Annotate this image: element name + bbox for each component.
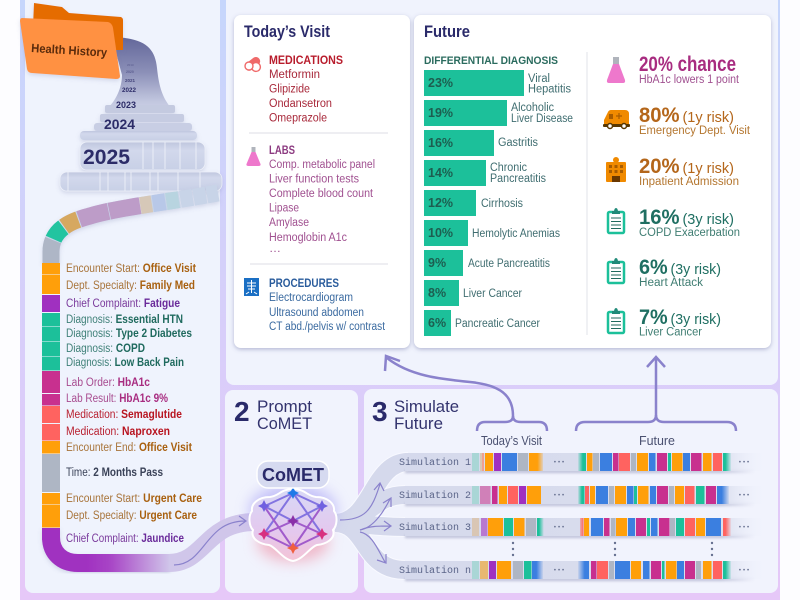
- labs list: Liver function tests: [269, 174, 359, 186]
- icon: clipboard liver cancer: [608, 308, 624, 333]
- medications list: [269, 55, 343, 124]
- differential diagnosis bar chart: Gastritis: [498, 137, 538, 149]
- procedures list: Ultrasound abdomen: [269, 307, 364, 319]
- event labels: Time: 2 Months Pass: [66, 467, 163, 479]
- arrow: today's visit bracket to card: [385, 356, 547, 431]
- simulation row n: •••: [739, 568, 751, 574]
- labs list: LABS: [269, 145, 295, 157]
- year labels: 2022: [122, 88, 137, 94]
- procedures list: Electrocardiogram: [269, 292, 353, 304]
- differential diagnosis bar chart: 16%: [428, 136, 453, 150]
- simulation row 3: [399, 518, 765, 538]
- procedures list: PROCEDURES: [269, 278, 339, 290]
- stat: liver cancer: 7%(3y risk): [639, 306, 721, 329]
- icon: ambulance: [603, 110, 630, 128]
- icon: health history folder: Health History: [31, 41, 108, 60]
- event labels: Medication: Semaglutide: [66, 409, 182, 421]
- year labels: 2020: [126, 70, 134, 74]
- card: future: [414, 15, 771, 348]
- labs list: Comp. metabolic panel: [269, 159, 375, 171]
- cloud blob: [249, 489, 337, 561]
- icon: clipboard heart attack: [608, 258, 624, 283]
- heading: step 3: [372, 396, 459, 433]
- ribbon timeline segments: [51, 193, 218, 263]
- differential diagnosis bar chart: Cirrhosis: [481, 198, 523, 210]
- simulation row 2: •••: [739, 493, 751, 499]
- simulation row 2: •••: [554, 493, 566, 499]
- ribbon column from folder: [108, 37, 171, 108]
- icon: health history folder: [20, 3, 123, 79]
- labs list: [269, 145, 375, 255]
- heading: future: Future: [424, 23, 470, 41]
- strip colour blocks: [42, 263, 60, 540]
- event labels: Dept. Specialty: Family Med: [66, 280, 195, 292]
- vertical ellipsis dots: [512, 542, 713, 556]
- simulation row 1: •••: [739, 460, 751, 466]
- simulation row 3: •••: [554, 525, 566, 531]
- stat: COPD: [639, 206, 740, 239]
- ribbon layers: [60, 105, 222, 191]
- event labels: Chief Complaint: Jaundice: [66, 533, 184, 545]
- year labels: 2025: [83, 146, 130, 169]
- stat: COPD: 16%(3y risk): [639, 206, 734, 229]
- stat: HbA1c chance: [639, 53, 740, 86]
- heading: step 2: [234, 396, 312, 433]
- differential diagnosis bar chart: Liver Cancer: [463, 288, 522, 300]
- simulation row n: [399, 561, 765, 581]
- differential diagnosis bar chart: Acute Pancreatitis: [468, 258, 550, 270]
- curved end of strip: [51, 528, 170, 563]
- differential diagnosis bar chart: DIFFERENTIAL DIAGNOSIS: [424, 55, 558, 67]
- simulation row 2: [399, 486, 765, 506]
- stat: inpatient admission: [639, 155, 739, 188]
- stat: heart attack: [639, 256, 721, 289]
- differential diagnosis bar chart: 6%: [428, 316, 446, 330]
- network nodes: [258, 487, 328, 554]
- differential diagnosis bar chart: 8%: [428, 286, 446, 300]
- ribbon into CoMET: [169, 516, 255, 565]
- event labels: Diagnosis: Type 2 Diabetes: [66, 328, 192, 340]
- event labels: Diagnosis: Essential HTN: [66, 314, 183, 326]
- simulation row 1: •••: [554, 460, 566, 466]
- heading: step 3: 3: [372, 396, 388, 427]
- stat: emergency visit: [639, 104, 751, 137]
- heading: step 3: Future: [394, 414, 443, 433]
- heading: step 2: Prompt: [257, 397, 312, 416]
- panel: health history: [25, 0, 220, 593]
- differential diagnosis bar chart: Pancreatic Cancer: [455, 318, 540, 330]
- medications list: Omeprazole: [269, 112, 327, 124]
- event labels: Lab Order: HbA1c: [66, 377, 151, 389]
- differential diagnosis bar chart: 23%: [428, 76, 453, 90]
- CoMET label: CoMET: [262, 465, 324, 485]
- stat: liver cancer: Liver Cancer: [639, 326, 702, 338]
- panel: prompt CoMET: [225, 390, 358, 593]
- event labels: Chief Complaint: Fatigue: [66, 298, 180, 310]
- event labels: Dept. Specialty: Urgent Care: [66, 510, 197, 522]
- year labels: 2023: [116, 100, 136, 110]
- panel: simulate future: [364, 389, 778, 593]
- simulation row 3: Simulation 3: [399, 522, 471, 534]
- simulation row 3: •••: [739, 525, 751, 531]
- icon: hospital: [606, 157, 626, 182]
- card: today's visit: [234, 15, 410, 348]
- event labels: Diagnosis: COPD: [66, 343, 145, 355]
- stat: inpatient admission: 20%(1y risk): [639, 155, 734, 178]
- labs list: …: [269, 243, 281, 255]
- stat: HbA1c chance: 20% chance: [639, 53, 736, 76]
- medications list: MEDICATIONS: [269, 55, 343, 67]
- differential diagnosis bar chart: 10%: [428, 226, 453, 240]
- stat: HbA1c chance: HbA1c lowers 1 point: [639, 74, 740, 86]
- panel: results: [226, 0, 778, 385]
- medications list: Metformin: [269, 69, 320, 81]
- year labels: 2021: [125, 78, 136, 83]
- medications list: Ondansetron: [269, 98, 332, 110]
- differential diagnosis bar chart: [424, 55, 573, 336]
- medications list: Glipizide: [269, 84, 310, 96]
- event labels: Medication: Naproxen: [66, 426, 170, 438]
- differential diagnosis bar chart: Alcoholic: [511, 102, 554, 114]
- event labels: [66, 263, 202, 545]
- stat: emergency visit: 80%(1y risk): [639, 104, 734, 127]
- heading: today's visit: Today’s Visit: [244, 23, 330, 41]
- event strip: [42, 263, 202, 563]
- differential diagnosis bar chart: 14%: [428, 166, 453, 180]
- icon: x-ray: [244, 278, 259, 296]
- simulation row n: Simulation n: [399, 565, 471, 577]
- stat: emergency visit: Emergency Dept. Visit: [639, 125, 751, 137]
- differential diagnosis bar chart: Pancreatitis: [490, 173, 546, 185]
- differential diagnosis bar chart: Hepatitis: [528, 84, 571, 96]
- icon: large flask: [607, 57, 625, 83]
- event labels: Encounter Start: Office Visit: [66, 263, 196, 275]
- simulation row 1: [399, 453, 765, 473]
- differential diagnosis bar chart: Hemolytic Anemias: [472, 228, 560, 240]
- differential diagnosis bar chart: 9%: [428, 256, 446, 270]
- arrow: future bracket to card: [576, 357, 736, 431]
- glow: [249, 484, 337, 562]
- simulation row n: •••: [554, 568, 566, 574]
- year labels: [83, 63, 137, 169]
- year labels: 2024: [104, 116, 135, 132]
- stat: COPD: COPD Exacerbation: [639, 227, 740, 239]
- procedures list: [269, 278, 386, 333]
- stat: liver cancer: [639, 306, 721, 338]
- CoMET model graphic: [249, 461, 337, 562]
- icon: flask: [246, 147, 261, 166]
- stat: heart attack: Heart Attack: [639, 277, 703, 289]
- stat: heart attack: 6%(3y risk): [639, 256, 721, 279]
- simulation row 2: Simulation 2: [399, 490, 471, 502]
- year labels: 2019: [127, 63, 134, 67]
- event labels: Lab Result: HbA1c 9%: [66, 393, 168, 405]
- differential diagnosis bar chart: 19%: [428, 106, 453, 120]
- heading: step 2: 2: [234, 396, 250, 427]
- heading: step 3: Simulate: [394, 397, 459, 416]
- label: today's visit column: Today’s Visit: [481, 434, 542, 448]
- labs list: Complete blood count: [269, 188, 374, 200]
- event labels: Encounter End: Office Visit: [66, 442, 192, 454]
- stat: inpatient admission: Inpatient Admission: [639, 176, 739, 188]
- icon: pills: [243, 55, 262, 72]
- simulation branch ribbons: [335, 462, 408, 570]
- labs list: Hemoglobin A1c: [269, 232, 347, 244]
- differential diagnosis bar chart: 12%: [428, 196, 453, 210]
- labs list: Lipase: [269, 202, 299, 214]
- differential diagnosis bar chart: Chronic: [490, 162, 527, 174]
- procedures list: CT abd./pelvis w/ contrast: [269, 321, 386, 333]
- event labels: Diagnosis: Low Back Pain: [66, 357, 184, 369]
- icon: clipboard COPD: [608, 208, 624, 233]
- event labels: Encounter Start: Urgent Care: [66, 493, 202, 505]
- differential diagnosis bar chart: Liver Disease: [511, 113, 573, 125]
- heading: step 2: CoMET: [257, 414, 312, 433]
- labs list: Amylase: [269, 217, 309, 229]
- differential diagnosis bar chart: Viral: [528, 73, 550, 85]
- simulation row 1: Simulation 1: [399, 457, 471, 469]
- network edges: [264, 493, 322, 548]
- label: future column: Future: [639, 434, 675, 448]
- health history ribbon stack: [51, 37, 222, 263]
